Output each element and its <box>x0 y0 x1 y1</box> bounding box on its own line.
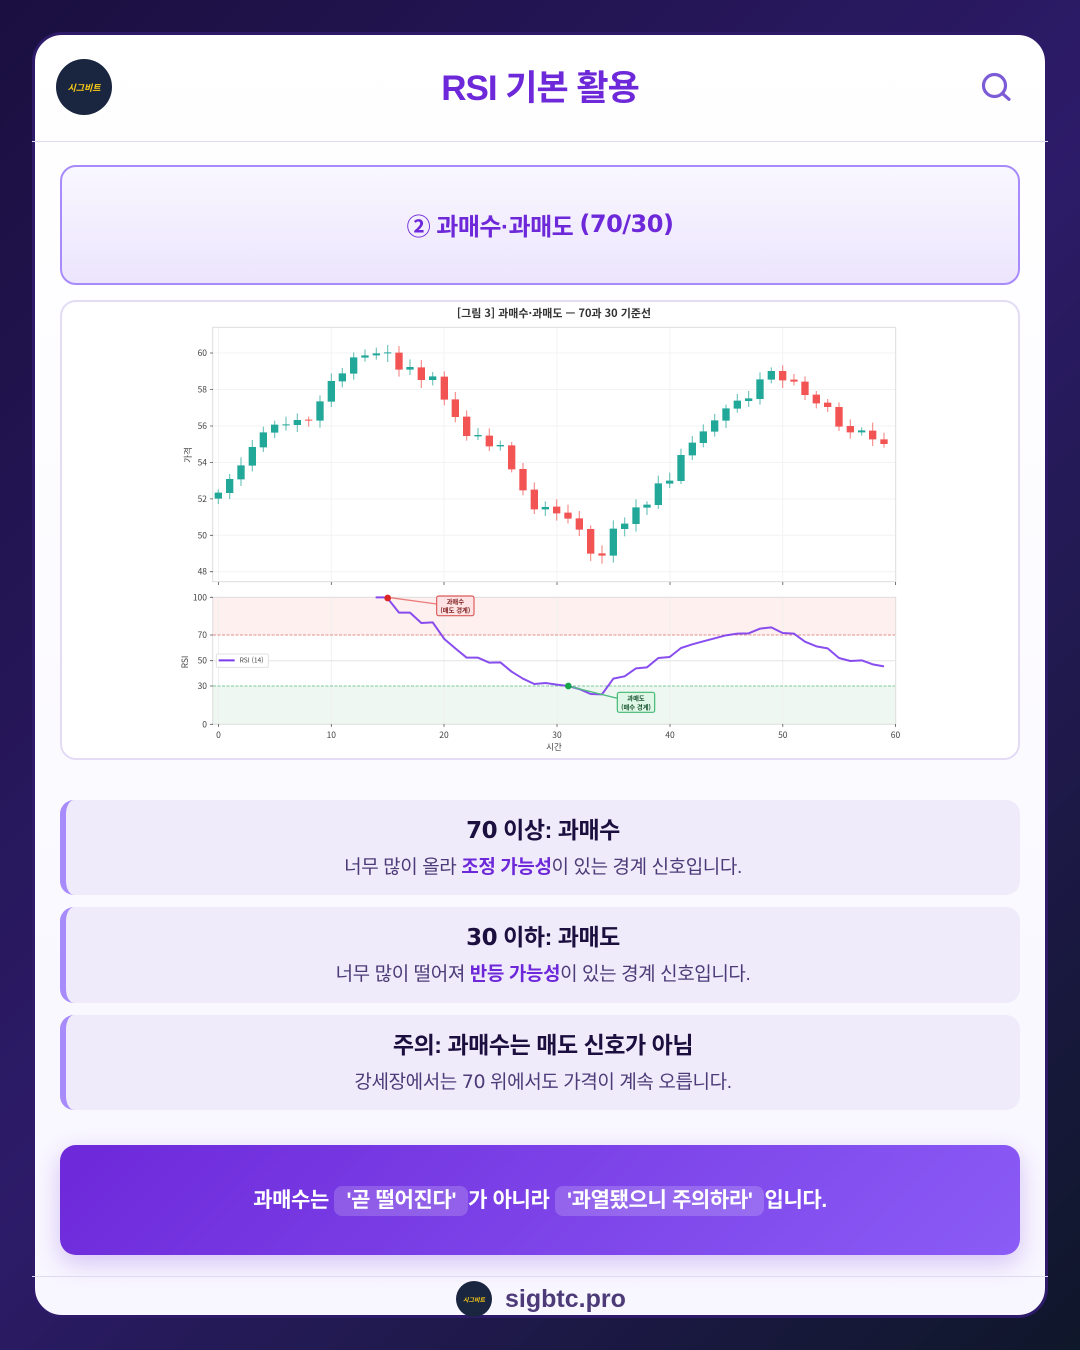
info text: 강세장에서는 70 위에서도 가격이 계속 오릅니다. <box>354 1071 732 1093</box>
legend: RSI (14) <box>240 655 263 665</box>
logo: 시그비트 <box>67 82 101 92</box>
info box: overbought <box>60 800 1020 895</box>
price axis labels: 58 <box>198 384 207 396</box>
RSI line <box>376 597 884 694</box>
RSI axis labels: 10 <box>327 729 336 741</box>
RSI chart <box>179 591 900 753</box>
logo <box>56 59 112 115</box>
info text: 너무 많이 올라 조정 가능성이 있는 경계 신호입니다. <box>344 857 742 878</box>
RSI axis labels: 70 <box>198 629 207 641</box>
annotation: oversold <box>565 683 655 712</box>
annotation: overbought: (매도 경계) <box>440 606 470 615</box>
annotation: overbought: 과매수 <box>447 597 464 606</box>
legend <box>216 654 268 667</box>
price chart <box>182 327 896 585</box>
header divider <box>32 141 1048 142</box>
annotation: overbought <box>384 595 474 616</box>
time axis title: 시간 <box>546 741 562 753</box>
RSI axis labels: 60 <box>891 729 900 741</box>
price axis labels: 54 <box>198 456 207 468</box>
icon: search <box>982 72 1011 101</box>
info title: 70 이상: 과매수 <box>466 817 620 844</box>
RSI axis labels: 30 <box>198 680 207 692</box>
overbought zone <box>213 597 896 635</box>
candlesticks <box>215 345 888 564</box>
section heading <box>60 165 1020 285</box>
callout: '곧 떨어진다' <box>346 1188 456 1212</box>
price axis labels <box>198 347 207 578</box>
title: RSI 기본 활용 <box>441 68 639 108</box>
price axis labels: 48 <box>198 566 207 578</box>
price axis labels: 52 <box>198 493 207 505</box>
RSI axis labels: 50 <box>198 655 207 667</box>
RSI axis title: RSI <box>179 656 191 668</box>
section heading: (70/30) <box>579 210 673 238</box>
info title: 주의: 과매수는 매도 신호가 아님 <box>393 1032 693 1058</box>
price axis title: 가격 <box>182 447 194 463</box>
price axis labels: 60 <box>198 347 207 359</box>
price axis labels: 50 <box>198 529 207 541</box>
chart title: [그림 3] 과매수·과매도 — 70과 30 기준선 <box>457 305 651 321</box>
price axis labels: 56 <box>198 420 207 432</box>
RSI axis labels <box>193 591 900 741</box>
RSI axis labels: 100 <box>193 591 207 603</box>
footer site name: sigbtc.pro <box>505 1285 626 1313</box>
RSI axis labels: 0 <box>202 718 207 730</box>
annotation: oversold: 과매도 <box>627 693 645 702</box>
panel: chart <box>60 300 1020 760</box>
RSI axis labels: 0 <box>216 729 221 741</box>
footer divider <box>32 1276 1048 1277</box>
info text: 너무 많이 떨어져 반등 가능성이 있는 경계 신호입니다. <box>336 964 750 985</box>
section heading: ② 과매수·과매도 <box>407 214 573 240</box>
callout <box>60 1145 1020 1255</box>
annotation: oversold: (매수 경계) <box>621 702 651 711</box>
RSI axis labels: 40 <box>665 729 675 741</box>
RSI axis labels: 30 <box>552 729 562 741</box>
RSI axis labels: 50 <box>778 729 788 741</box>
callout: '과열됐으니 주의하라' <box>567 1188 752 1212</box>
info box: caution <box>60 1015 1020 1110</box>
info title: 30 이하: 과매도 <box>466 924 620 951</box>
footer logo <box>456 1281 492 1317</box>
callout: 과매수는 가 아니라 입니다. <box>253 1188 827 1212</box>
footer logo: 시그비트 <box>463 1298 485 1304</box>
info box: oversold <box>60 907 1020 1003</box>
oversold zone <box>213 686 896 724</box>
RSI axis labels: 20 <box>439 729 449 741</box>
